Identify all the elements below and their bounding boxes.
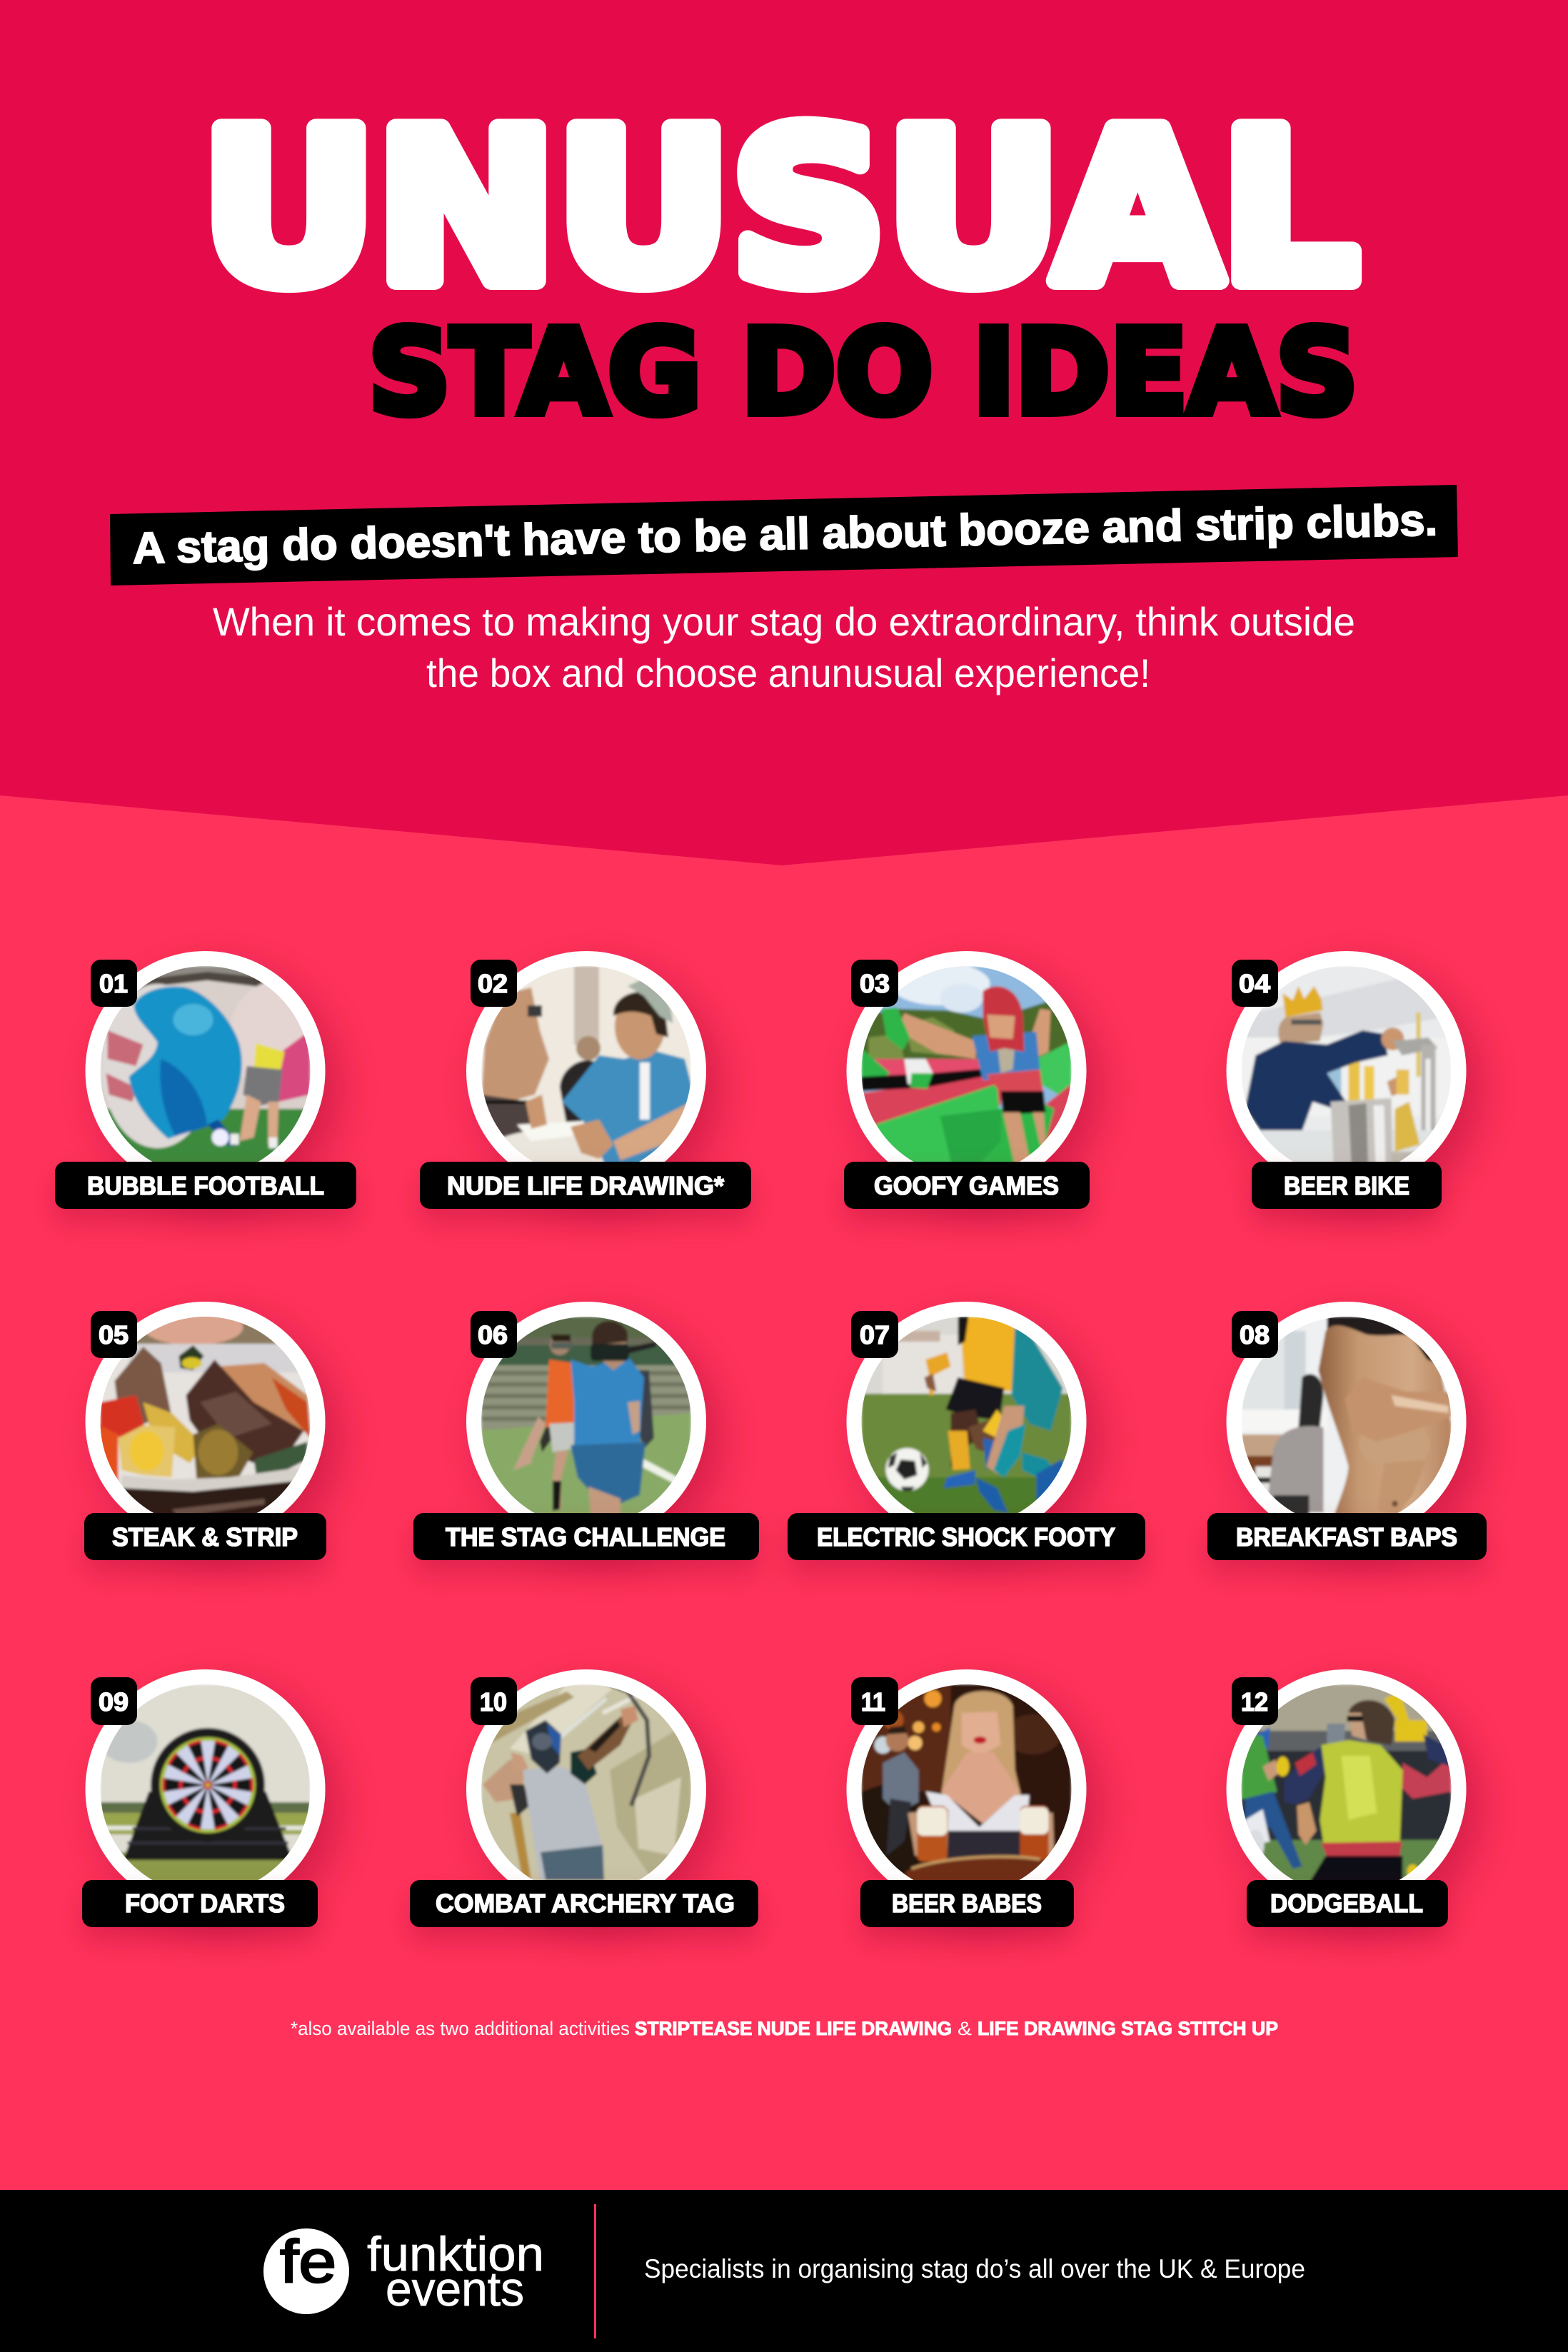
footnote: LIFE DRAWING STAG STITCH UP — [978, 2018, 1278, 2039]
photo: stag challenge — [481, 1317, 691, 1527]
photo: bubble football — [100, 966, 310, 1162]
label: combat archery tag — [410, 1880, 758, 1927]
card 05: steak & strip — [84, 1302, 326, 1560]
title: UNUSUAL: UNUSUAL — [201, 87, 1358, 331]
card 06: the stag challenge — [413, 1302, 759, 1560]
banner text: A stag do doesn't have to be all about booze and strip clubs. — [132, 496, 1438, 573]
card 07: electric shock footy — [788, 1302, 1145, 1560]
label: beer babes: BEER BABES — [892, 1889, 1042, 1918]
intro text: the box and choose anunusual experience! — [426, 650, 1150, 695]
tilted banner — [110, 485, 1458, 586]
label: beer babes — [860, 1880, 1074, 1927]
number badge 01: 01 — [99, 969, 128, 998]
number badge 05: 05 — [99, 1320, 129, 1350]
number badge 02 — [471, 960, 517, 1007]
label: foot darts: FOOT DARTS — [125, 1889, 285, 1918]
card 10: combat archery tag — [410, 1669, 758, 1927]
footer divider — [594, 2204, 596, 2338]
number badge 12: 12 — [1241, 1687, 1268, 1717]
logo mark — [263, 2228, 349, 2314]
photo: electric shock footy — [861, 1317, 1071, 1527]
photo: life drawing — [481, 966, 691, 1176]
footnote: STRIPTEASE NUDE LIFE DRAWING — [635, 2018, 952, 2039]
title: STAG DO IDEAS: STAG DO IDEAS — [368, 306, 1358, 441]
footnote: & — [958, 2018, 972, 2039]
label: bubble football — [55, 1162, 356, 1209]
card 12: dodgeball — [1227, 1669, 1467, 1927]
number badge 06: 06 — [478, 1320, 508, 1350]
label: dodgeball — [1247, 1880, 1448, 1927]
footer bar — [0, 2190, 1568, 2352]
label: foot darts — [82, 1880, 318, 1927]
intro text: When it comes to making your stag do extraordinary, think outside — [213, 599, 1355, 644]
logo wordmark — [367, 2227, 544, 2316]
card 04: beer bike — [1227, 951, 1467, 1209]
card 01: bubble football — [55, 951, 356, 1209]
logo wordmark: events — [386, 2262, 524, 2316]
number badge 07 — [851, 1311, 898, 1358]
photo: breakfast baps — [1241, 1317, 1451, 1527]
footer tagline: Specialists in organising stag do’s all over the UK & Europe — [644, 2254, 1305, 2283]
footnote — [291, 2018, 1278, 2039]
number badge 11: 11 — [861, 1687, 885, 1717]
logo wordmark: funktion — [367, 2227, 544, 2281]
number badge 09: 09 — [99, 1687, 129, 1717]
label: the stag challenge: THE STAG CHALLENGE — [446, 1522, 725, 1552]
number badge 11 — [851, 1677, 898, 1725]
label: the stag challenge — [413, 1513, 759, 1560]
number badge 08 — [1232, 1311, 1278, 1358]
number badge 10: 10 — [480, 1687, 507, 1717]
label: nude life drawing: NUDE LIFE DRAWING* — [447, 1171, 724, 1200]
label: electric shock footy: ELECTRIC SHOCK FOOTY — [817, 1522, 1115, 1552]
photo: dodgeball — [1241, 1684, 1451, 1894]
label: combat archery tag: COMBAT ARCHERY TAG — [436, 1889, 735, 1918]
photo: beer bike — [1241, 966, 1451, 1176]
label: breakfast baps: BREAKFAST BAPS — [1236, 1522, 1457, 1552]
label: beer bike — [1252, 1162, 1442, 1209]
card 09: foot darts — [82, 1669, 326, 1927]
number badge 07: 07 — [860, 1320, 890, 1350]
label: goofy games — [844, 1162, 1090, 1209]
intro text — [213, 599, 1355, 695]
label: electric shock footy — [788, 1513, 1145, 1560]
label: beer bike: BEER BIKE — [1284, 1171, 1409, 1200]
number badge 09 — [91, 1677, 137, 1725]
number badge 08: 08 — [1240, 1320, 1270, 1350]
label: steak & strip — [84, 1513, 326, 1560]
label: nude life drawing — [420, 1162, 751, 1209]
number badge 04 — [1232, 960, 1278, 1007]
number badge 05 — [91, 1311, 137, 1358]
photo: steak — [100, 1317, 310, 1513]
label: goofy games: GOOFY GAMES — [874, 1171, 1059, 1200]
card 11: beer babes — [847, 1669, 1087, 1927]
photo: combat archery — [481, 1679, 691, 1894]
card 03: goofy games — [844, 951, 1090, 1209]
number badge 06 — [471, 1311, 517, 1358]
card 02: nude life drawing — [420, 951, 751, 1209]
logo mark: fe — [280, 2228, 336, 2295]
number badge 01 — [91, 960, 137, 1007]
logo: funktion events — [263, 2227, 544, 2316]
label: breakfast baps — [1207, 1513, 1487, 1560]
label: bubble football: BUBBLE FOOTBALL — [87, 1171, 324, 1200]
label: steak & strip: STEAK & STRIP — [112, 1522, 298, 1552]
card 08: breakfast baps — [1207, 1302, 1487, 1560]
number badge 02: 02 — [478, 969, 508, 998]
number badge 03 — [851, 960, 898, 1007]
label: dodgeball: DODGEBALL — [1270, 1889, 1423, 1918]
number badge 03: 03 — [860, 969, 890, 998]
photo: goofy games — [861, 963, 1071, 1176]
photo: beer babes — [861, 1684, 1071, 1894]
footnote: *also available as two additional activities — [291, 2018, 630, 2039]
number badge 04: 04 — [1239, 969, 1270, 998]
header panel — [0, 0, 1568, 865]
number badge 10 — [471, 1677, 517, 1725]
photo: foot darts — [100, 1684, 310, 1894]
number badge 12 — [1232, 1677, 1278, 1725]
